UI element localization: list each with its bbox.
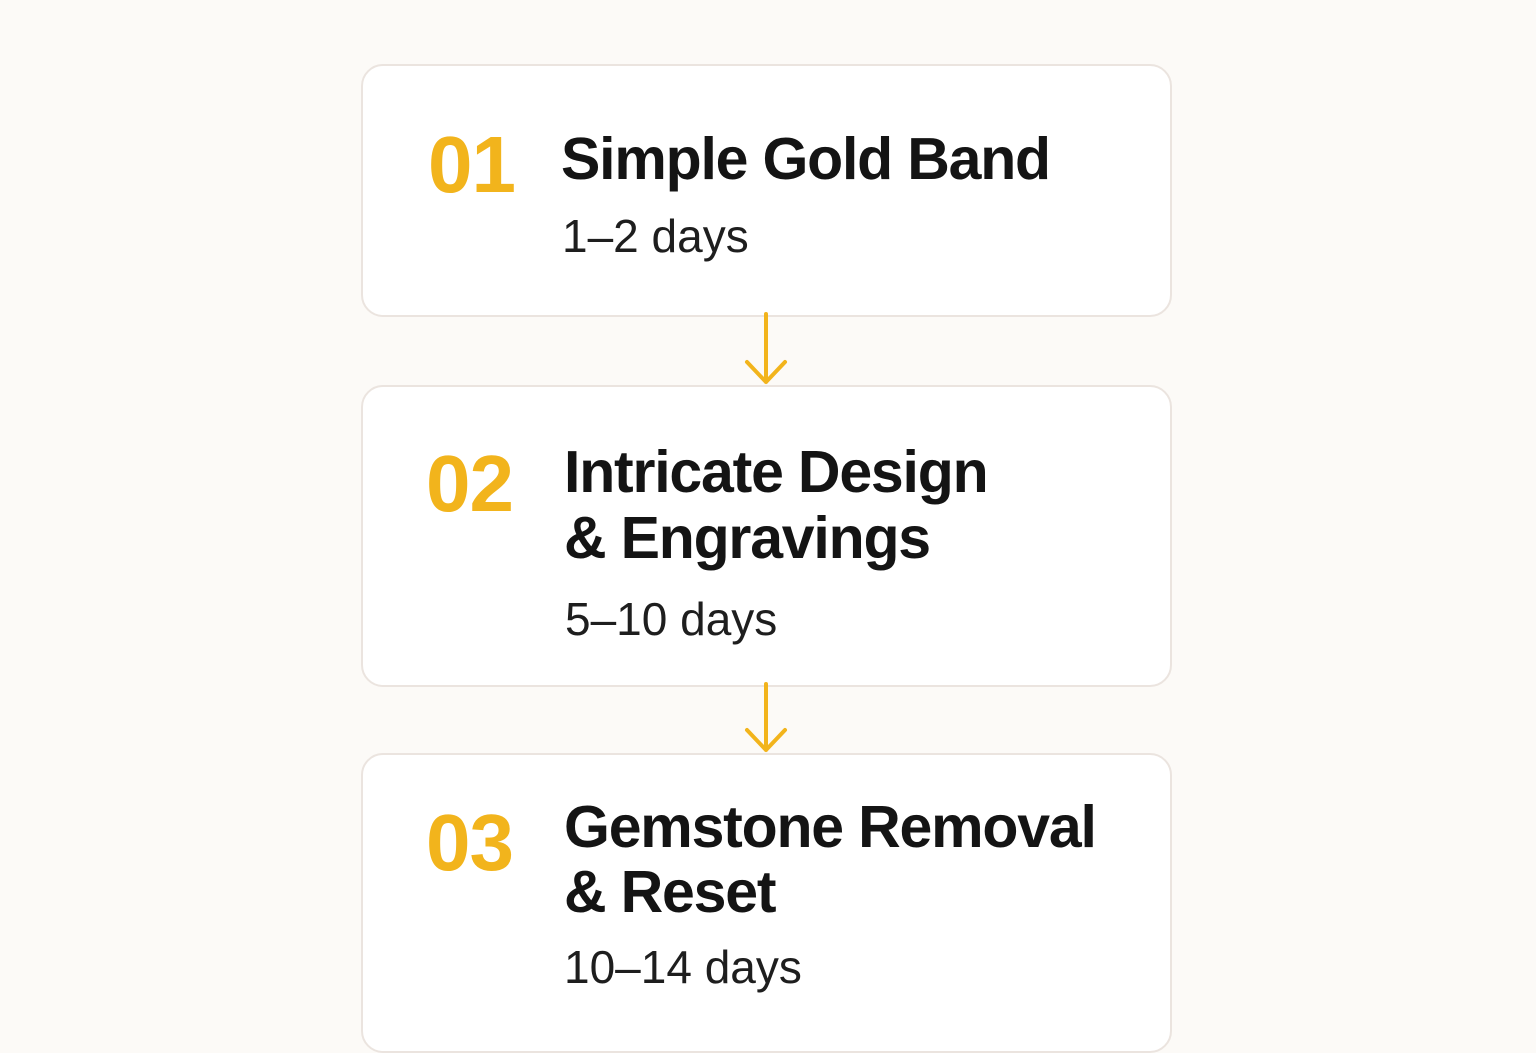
title: Intricate Design & Engravings	[564, 439, 987, 571]
title: Intricate Design & Engravings: & Engravings	[564, 505, 930, 571]
card: step 03	[361, 753, 1172, 1053]
arrow 2	[744, 682, 788, 752]
card: step 01	[361, 64, 1172, 317]
title: Intricate Design & Engravings: Intricate Design	[564, 439, 987, 505]
duration 10–14 days: 10–14 days	[564, 941, 802, 993]
number 01: 01	[428, 120, 515, 209]
title: Gemstone Removal & Reset	[564, 794, 1096, 925]
title: Simple Gold Band: Simple Gold Band	[561, 126, 1050, 192]
duration 5–10 days: 5–10 days	[565, 593, 777, 645]
arrow 1	[744, 312, 788, 384]
number 03: 03	[426, 798, 513, 887]
title: Gemstone Removal & Reset: & Reset	[564, 859, 775, 925]
title: Gemstone Removal & Reset: Gemstone Removal	[564, 794, 1096, 860]
card: step 02	[361, 385, 1172, 687]
number 02: 02	[426, 439, 513, 528]
duration 1–2 days: 1–2 days	[562, 210, 749, 262]
